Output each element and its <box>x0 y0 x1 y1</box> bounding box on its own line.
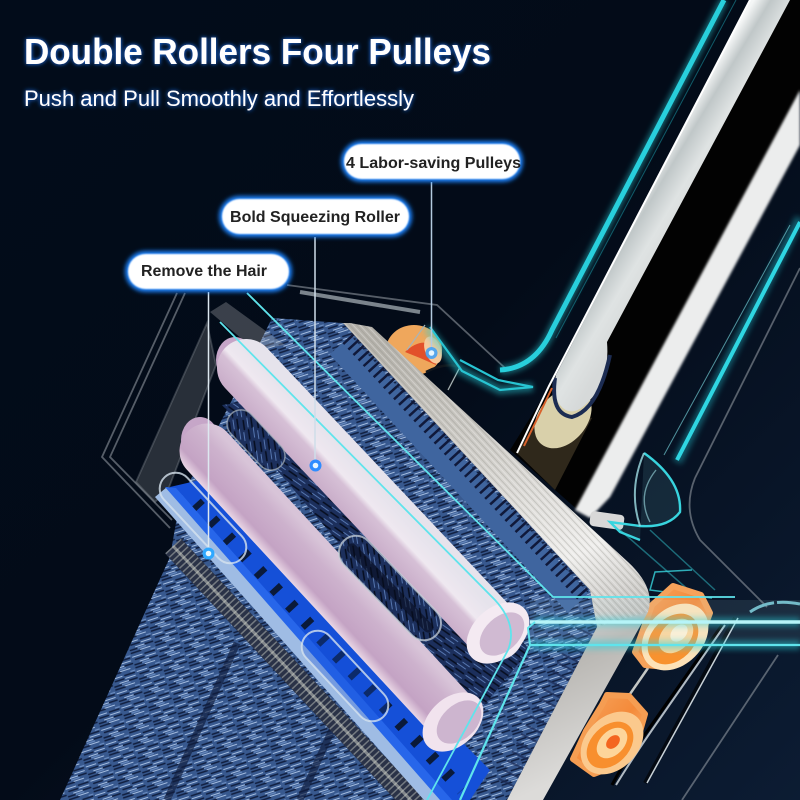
handle shaft <box>510 0 800 530</box>
glass window: top <box>221 404 291 476</box>
olive lower shaft section <box>517 405 592 490</box>
horizontal frame <box>530 620 800 624</box>
dark fibre between rollers <box>222 395 530 710</box>
main handle trace <box>500 0 724 370</box>
upper roller <box>216 337 541 676</box>
label: Bold Squeezing Roller <box>219 196 412 237</box>
glass side rails near pulleys <box>612 602 800 785</box>
label: Bold Squeezing Roller: Bold Squeezing Roller <box>230 209 400 226</box>
second trace over mop <box>247 293 735 597</box>
right handle socket lines <box>664 218 800 462</box>
title: Double Rollers Four Pulleys <box>24 31 491 72</box>
label: Remove the Hair <box>125 251 292 292</box>
label: 4 Labor-saving Pulleys: 4 Labor-saving Pulleys <box>346 155 521 172</box>
glass window: upper <box>332 529 448 647</box>
white stripe <box>575 90 800 518</box>
leader line: roller <box>310 237 322 472</box>
pipe fringe <box>554 355 610 417</box>
teal frame lines <box>220 0 800 800</box>
pulley: upper right <box>628 586 722 684</box>
rod between pulleys <box>630 668 648 694</box>
label: Remove the Hair: Remove the Hair <box>141 263 267 280</box>
silver stripe and pipe <box>555 0 790 411</box>
leader line: hair <box>202 292 214 560</box>
leader line: pulleys <box>426 182 438 359</box>
rear frame trace <box>430 327 533 390</box>
glass window: lower <box>295 624 395 728</box>
black shaft body <box>510 0 800 512</box>
inner frame trace over roller <box>220 322 511 800</box>
foot piece <box>589 511 625 530</box>
label: 4 Labor-saving Pulleys <box>341 141 523 182</box>
glass window: mid-left <box>153 466 253 570</box>
pale edge strip <box>155 487 444 800</box>
subtitle: Push and Pull Smoothly and Effortlessly <box>24 86 415 111</box>
ghost frame outline <box>102 268 800 800</box>
blue hair-removal comb <box>155 480 490 800</box>
comb fringe <box>170 480 490 800</box>
mop pad <box>60 318 597 800</box>
pulley: small rear <box>386 325 460 390</box>
glass front panel <box>530 600 800 645</box>
pad fold shadows <box>167 643 237 800</box>
fibre field <box>60 318 597 800</box>
metal plate <box>343 323 650 800</box>
pulley: lower right <box>568 695 656 787</box>
lower roller <box>181 417 495 763</box>
twisted rope edge <box>340 345 578 603</box>
comb teeth <box>196 503 462 790</box>
glass over roller top <box>210 302 285 350</box>
pulley wire <box>426 365 460 390</box>
gold end cap <box>523 377 603 459</box>
glass hinge bowl <box>610 453 715 600</box>
ribbed ghost band <box>173 546 418 800</box>
